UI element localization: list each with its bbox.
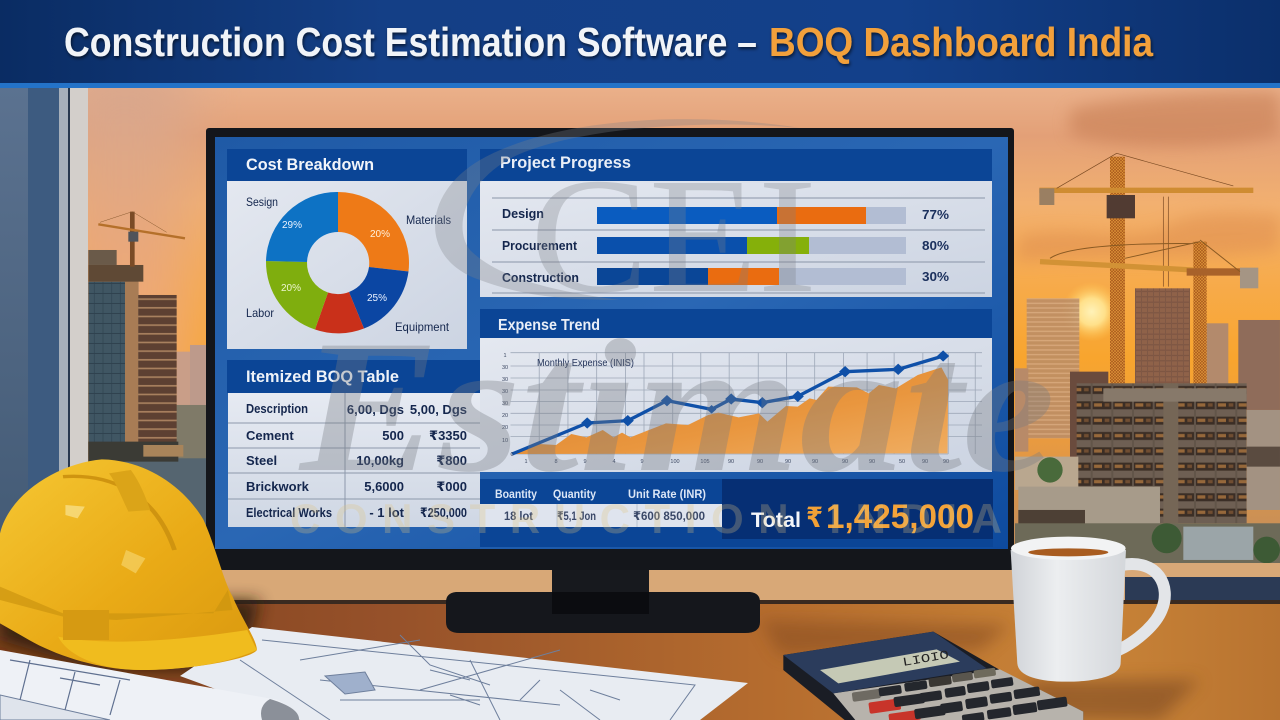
chart axis labels: [502, 353, 949, 465]
total value: 1,425,000: [826, 498, 974, 536]
watermark: Estimate script: Estimate: [298, 302, 1055, 512]
chart axis labels: 30: [502, 377, 508, 383]
donut chart: 25%: [367, 293, 387, 304]
heading: cost breakdown: Cost Breakdown: [246, 155, 374, 174]
summary headers: [495, 487, 706, 501]
progress row: construction: Construction: [502, 270, 579, 285]
calculator: [783, 632, 1083, 720]
donut labels: [246, 195, 451, 334]
panel: expense trend: Monthly Expense (INIS): [537, 358, 634, 369]
chart axis labels: 1: [524, 459, 528, 465]
donut chart: 20%: [370, 229, 390, 240]
progress row: procurement: Procurement: [502, 238, 578, 253]
chart axis labels: 10: [502, 438, 508, 444]
summary headers: Boantity: [495, 487, 537, 501]
table rows: ₹000: [436, 479, 467, 494]
rolled blueprints and plan sheet: [0, 627, 748, 720]
watermark: CEI logo: CEI: [530, 144, 817, 327]
monitor: [206, 119, 1055, 633]
coffee mug: [1011, 537, 1165, 682]
chart axis labels: 20: [502, 413, 508, 419]
panel: project progress: [480, 149, 992, 297]
chart axis labels: 90: [869, 459, 875, 465]
chart axis labels: 8: [554, 459, 558, 465]
total value: ₹: [806, 502, 823, 533]
table rows: - 1 lot: [369, 505, 405, 520]
wooden desk: [0, 600, 1280, 720]
chart axis labels: 90: [757, 459, 763, 465]
table rows: Steel: [246, 453, 277, 468]
calculator display: LIOIO: [902, 648, 950, 670]
window view: left skyline: [88, 212, 222, 552]
chart axis labels: 9: [640, 459, 644, 465]
chart axis labels: 90: [728, 459, 734, 465]
heading: itemized BOQ table: Itemized BOQ Table: [246, 367, 399, 386]
table rows: Brickwork: [246, 479, 310, 494]
total value: Total: [751, 509, 801, 532]
summary row: ₹5,1 Jon: [557, 509, 596, 523]
progress row: design: [502, 206, 949, 224]
chart axis labels: 100: [670, 459, 680, 465]
window sill behind monitor: [160, 563, 1280, 605]
table rows: [246, 401, 467, 520]
table rows: ₹250,000: [420, 505, 467, 520]
progress row: construction: 30%: [922, 269, 949, 284]
chart axis labels: 9: [583, 459, 587, 465]
donut labels: Sesign: [246, 195, 278, 209]
table rows: Description: [246, 401, 308, 416]
chart axis labels: 90: [812, 459, 818, 465]
donut chart: 29%: [282, 220, 302, 231]
progress row: procurement: 80%: [922, 238, 949, 253]
chart axis labels: 30: [502, 365, 508, 371]
crane: tower crane left: [1039, 153, 1253, 388]
total value: [751, 498, 974, 536]
table rows: ₹3350: [429, 428, 467, 443]
panel: cost breakdown: [227, 149, 467, 349]
chart axis labels: 30: [502, 389, 508, 395]
chart axis labels: 105: [700, 459, 710, 465]
window view: sky: [0, 60, 1280, 600]
chart axis labels: 90: [842, 459, 848, 465]
calculator keys: [852, 668, 1068, 720]
table rows: 6,00, Dgs: [347, 402, 404, 417]
table rows: 5,00, Dgs: [410, 402, 467, 417]
summary headers: Quantity: [553, 487, 596, 501]
left wall and window frame: [0, 85, 88, 645]
chart axis labels: 20: [502, 425, 508, 431]
heading: project progress: Project Progress: [500, 153, 631, 172]
crane: tower crane right: [1040, 240, 1258, 388]
donut chart: 20%: [281, 283, 301, 294]
summary headers: Unit Rate (INR): [628, 487, 706, 501]
window view: right skyline with cranes: [1015, 153, 1280, 563]
line and area chart: [510, 350, 982, 454]
chart axis labels: 4: [612, 459, 616, 465]
monitor stand: [446, 570, 760, 633]
heading: expense trend: Expense Trend: [498, 317, 600, 334]
donut chart: [266, 192, 409, 333]
title: orange part: BOQ Dashboard India: [769, 19, 1154, 65]
chart axis labels: 0: [510, 452, 514, 458]
chart axis labels: 90: [943, 459, 949, 465]
progress row: procurement: [502, 237, 949, 254]
summary row: [480, 504, 722, 527]
chart axis labels: 90: [922, 459, 928, 465]
chart axis labels: 50: [899, 459, 905, 465]
table rows: ₹800: [436, 453, 467, 468]
table rows: 10,00kg: [356, 453, 404, 468]
donut labels: Materials: [406, 213, 451, 227]
yellow hard hat: [0, 459, 257, 670]
calculator display: [820, 648, 960, 683]
watermark: construction india: CONSTRUCTION INDIA: [290, 495, 1002, 542]
table rows: Electrical Works: [246, 505, 332, 520]
chart axis labels: 1: [503, 353, 507, 359]
summary row: ₹600 850,000: [633, 509, 705, 523]
table rows: Cement: [246, 428, 294, 443]
title: white part: Construction Cost Estimation Software –: [64, 19, 757, 65]
progress row: design: 77%: [922, 207, 949, 222]
chart axis labels: 90: [785, 459, 791, 465]
donut labels: Equipment: [395, 320, 450, 334]
blueprint roll: [0, 650, 299, 720]
panel: itemized BOQ table: [227, 360, 480, 527]
chart axis labels: 30: [502, 401, 508, 407]
table rows: 5,6000: [364, 479, 404, 494]
watermark: CEI logo: [435, 119, 817, 327]
title bar: [0, 0, 1280, 88]
summary row: 18 lot: [504, 509, 533, 523]
panel: expense trend: [480, 309, 992, 472]
table rows: 500: [382, 428, 404, 443]
progress row: design: Design: [502, 206, 544, 221]
total band with summary row: [480, 479, 993, 547]
donut labels: Labor: [246, 306, 274, 320]
progress row: construction: [502, 268, 949, 285]
